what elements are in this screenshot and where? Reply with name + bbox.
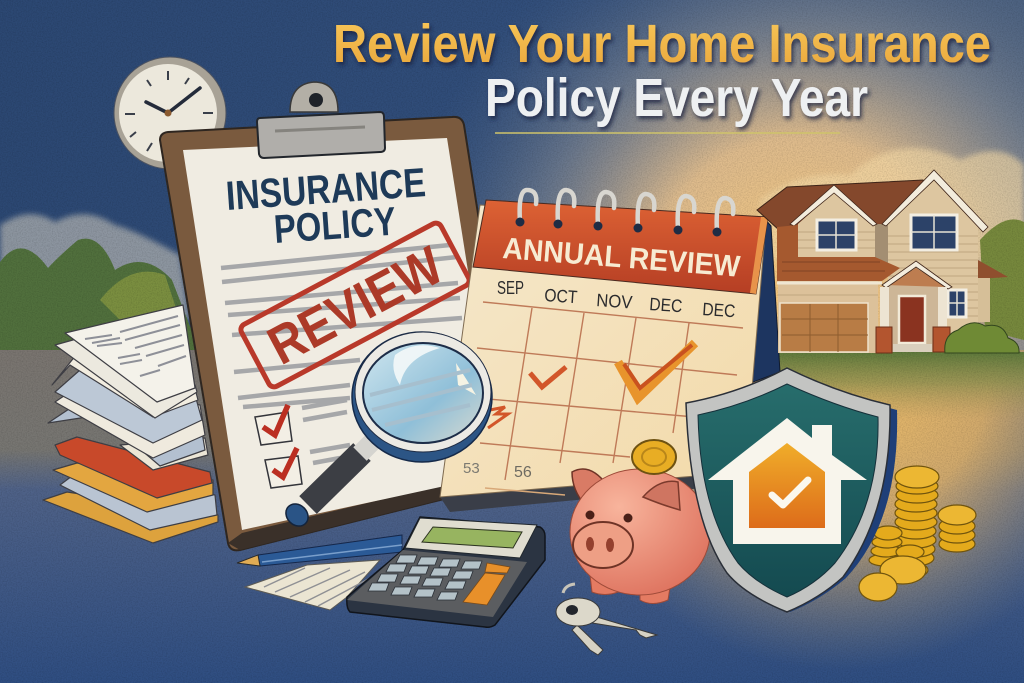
calendar page	[440, 205, 766, 497]
check: large	[618, 343, 695, 398]
heading: insurance policy: POLICY	[273, 200, 398, 252]
gable trims	[790, 185, 877, 226]
house left gable wall	[798, 192, 875, 258]
pencil	[237, 535, 402, 566]
calculator display panel	[405, 518, 537, 558]
month labels: NOV	[596, 290, 633, 313]
icon: magnifying glass	[281, 332, 492, 531]
icon: pencil and paper	[237, 535, 402, 610]
heading: insurance policy: INSURANCE	[224, 159, 427, 219]
title line 2: Policy Every Year	[485, 68, 868, 128]
month labels	[497, 278, 736, 321]
snout	[573, 522, 633, 568]
calendar back stand	[745, 217, 780, 385]
calendar grid	[465, 302, 743, 480]
windows	[817, 215, 966, 317]
check: partial	[488, 407, 508, 428]
checkbox 1	[255, 405, 292, 445]
heading: insurance policy	[224, 159, 427, 252]
stamp: review: REVIEW	[258, 235, 453, 377]
clipboard board	[160, 117, 520, 550]
pig ears	[572, 469, 607, 505]
month labels: DEC	[702, 299, 736, 321]
calculator orange keys	[463, 563, 510, 605]
month labels: OCT	[544, 285, 578, 307]
date numbers: 53	[463, 460, 480, 477]
house badge	[708, 418, 867, 544]
ring holes	[516, 218, 722, 236]
front door	[899, 296, 925, 343]
calculator keys	[368, 555, 482, 600]
calculator body	[347, 517, 545, 627]
panel: clipboard	[160, 82, 520, 550]
house lower roof	[777, 225, 900, 281]
icon: house	[757, 170, 1019, 353]
icon: coin stacks	[859, 466, 976, 601]
icon: calculator	[347, 517, 545, 627]
panel: calendar: 56	[514, 464, 532, 481]
window mullions	[817, 215, 966, 317]
house right side	[975, 260, 1008, 322]
pig legs	[590, 575, 672, 604]
icon: paper stack	[43, 305, 218, 543]
text lines	[221, 245, 462, 463]
coin in slot	[632, 440, 676, 474]
clipboard paper	[183, 138, 500, 530]
house right wing wall	[888, 178, 978, 352]
calendar under pages	[440, 470, 745, 512]
icon: shield with home	[686, 368, 897, 612]
calendar header	[473, 200, 768, 294]
clipboard clip	[257, 82, 385, 158]
panel: calendar	[440, 190, 780, 512]
porch	[876, 261, 952, 353]
calendar rings	[520, 190, 733, 232]
bush	[945, 323, 1019, 353]
calendar heading: ANNUAL REVIEW	[501, 232, 742, 284]
title underline	[495, 132, 840, 134]
pig body	[570, 469, 710, 595]
icon: wall clock	[114, 57, 226, 169]
porch steps	[893, 344, 932, 352]
garage door	[780, 303, 868, 352]
house upper roof	[757, 180, 935, 240]
month labels: DEC	[649, 294, 683, 316]
calculator display	[422, 527, 522, 548]
icon: keys	[556, 584, 657, 655]
house lower wall	[778, 281, 878, 353]
checkbox 2	[265, 448, 302, 488]
check: small	[530, 367, 566, 387]
icon: piggy bank	[570, 440, 710, 604]
month labels: SEP	[497, 278, 524, 298]
